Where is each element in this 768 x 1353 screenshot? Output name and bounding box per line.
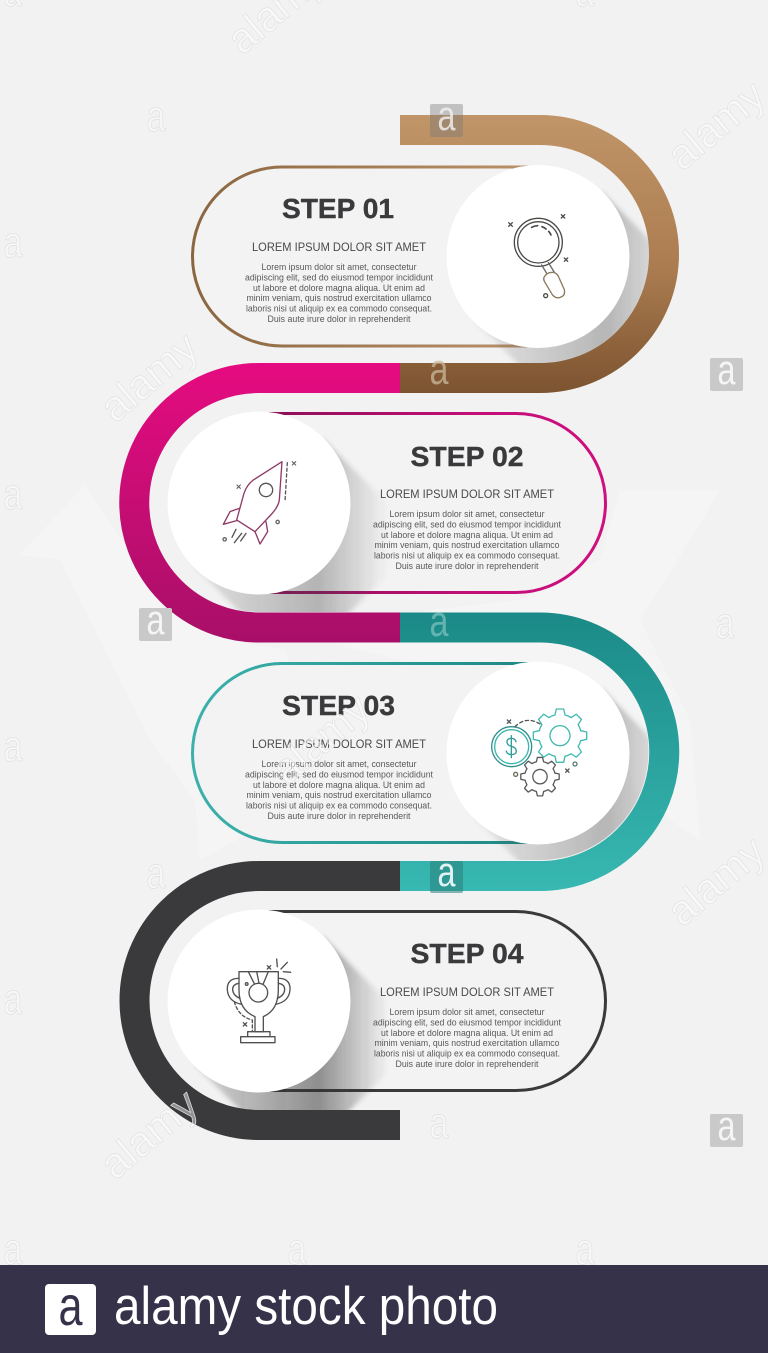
watermark letters: a xyxy=(4,975,23,1024)
watermark tiles: a xyxy=(430,345,449,394)
panel: step 02 xyxy=(168,412,607,612)
body text 01: Duis aute irure dolor in reprehenderit xyxy=(268,314,411,324)
watermark letters: a xyxy=(4,722,23,771)
watermark letters: a xyxy=(576,470,595,519)
subheading 03: LOREM IPSUM DOLOR SIT AMET xyxy=(252,737,427,751)
body text 03: ut labore et dolore magna aliqua. Ut enim ad xyxy=(253,780,425,790)
watermark letters: a xyxy=(288,218,307,267)
band: teal xyxy=(400,628,664,876)
body text 01 xyxy=(245,262,433,324)
watermark letters: a xyxy=(288,1225,307,1274)
heading 02: STEP 02 xyxy=(410,441,524,472)
body text 03: laboris nisi ut aliquip ex ea commodo consequat. xyxy=(246,801,432,811)
watermark letters: a xyxy=(288,722,307,771)
watermark tiles: a xyxy=(438,92,456,139)
body text 02: laboris nisi ut aliquip ex ea commodo consequat. xyxy=(374,551,560,561)
watermark words: alamy xyxy=(263,685,379,793)
subheading 01: LOREM IPSUM DOLOR SIT AMET xyxy=(252,240,427,254)
long shadow 02 xyxy=(204,438,378,612)
watermark letters: a xyxy=(576,722,595,771)
icon: trophy xyxy=(227,959,291,1043)
long shadow 04 xyxy=(195,935,384,1110)
body text 02: ut labore et dolore magna aliqua. Ut enim ad xyxy=(381,530,553,540)
watermark letters: a xyxy=(576,218,595,267)
footer wordmark: alamy stock photo xyxy=(114,1277,498,1336)
circle 03 xyxy=(446,662,630,844)
body text 04: laboris nisi ut aliquip ex ea commodo consequat. xyxy=(374,1049,560,1059)
pill outline 03 xyxy=(192,664,622,842)
panel: step 01 xyxy=(191,165,649,363)
body text 04: Lorem ipsum dolor sit amet, consectetur xyxy=(390,1007,544,1017)
body text 02: adipiscing elit, sed do eiusmod tempor incididunt xyxy=(373,519,561,529)
watermark tiles: a xyxy=(430,597,449,646)
subheading 04: LOREM IPSUM DOLOR SIT AMET xyxy=(380,985,555,999)
body text 04: ut labore et dolore magna aliqua. Ut enim ad xyxy=(381,1028,553,1038)
watermark letters: a xyxy=(576,975,595,1024)
circle 04 xyxy=(168,910,350,1092)
watermark tiles: a xyxy=(718,1102,736,1149)
body text 02 xyxy=(373,509,561,571)
pill outline 01 xyxy=(192,167,622,346)
icon: magnifier xyxy=(509,215,568,298)
watermark letters: a xyxy=(4,470,23,519)
watermark tiles xyxy=(139,92,743,1149)
watermark words: alamy xyxy=(91,323,207,431)
panel: step 04 xyxy=(168,910,607,1110)
circle 01 xyxy=(446,165,630,348)
watermark tiles: a xyxy=(146,596,165,643)
footer logo xyxy=(45,1274,96,1337)
body text 03: adipiscing elit, sed do eiusmod tempor incididunt xyxy=(245,769,433,779)
band: brown xyxy=(400,130,664,378)
panel: step 03 xyxy=(191,662,648,860)
watermark letters: a xyxy=(4,218,23,267)
long shadow 01 xyxy=(486,191,649,363)
body text 01: ut labore et dolore magna aliqua. Ut enim ad xyxy=(253,283,425,293)
world map backdrop xyxy=(20,485,720,860)
band: magenta xyxy=(134,378,400,628)
body text 03 xyxy=(245,759,433,821)
heading 03: STEP 03 xyxy=(282,690,395,721)
body text 03: Lorem ipsum dolor sit amet, consectetur xyxy=(262,759,416,769)
body text 03: minim veniam, quis nostrud exercitation ullamco xyxy=(246,790,432,800)
body text 01: laboris nisi ut aliquip ex ea commodo consequat. xyxy=(246,304,432,314)
watermark letters: a xyxy=(146,849,166,898)
watermark words xyxy=(91,0,768,1188)
watermark tiles: a xyxy=(438,848,456,895)
footer bar xyxy=(0,1265,768,1353)
circle 02 xyxy=(168,412,350,594)
watermark letters: a xyxy=(4,1225,23,1274)
body text 04 xyxy=(373,1007,561,1069)
footer logo: a xyxy=(58,1274,83,1337)
body text 04: Duis aute irure dolor in reprehenderit xyxy=(396,1059,539,1069)
pill outline 02 xyxy=(176,414,606,592)
watermark words: alamy xyxy=(91,1080,207,1188)
subheading 02: LOREM IPSUM DOLOR SIT AMET xyxy=(380,487,555,501)
body text 01: adipiscing elit, sed do eiusmod tempor incididunt xyxy=(245,272,433,282)
body text 01: minim veniam, quis nostrud exercitation ullamco xyxy=(246,293,432,303)
watermark letters: a xyxy=(288,975,307,1024)
watermark letters: a xyxy=(288,470,307,519)
heading 04: STEP 04 xyxy=(410,938,524,969)
body text 03: Duis aute irure dolor in reprehenderit xyxy=(268,811,411,821)
icon: coin and gears xyxy=(492,709,587,796)
body text 02: Lorem ipsum dolor sit amet, consectetur xyxy=(390,509,544,519)
body text 01: Lorem ipsum dolor sit amet, consectetur xyxy=(262,262,416,272)
body text 02: minim veniam, quis nostrud exercitation ullamco xyxy=(374,540,560,550)
body text 02: Duis aute irure dolor in reprehenderit xyxy=(396,561,539,571)
watermark letters: a xyxy=(146,92,166,141)
icon: rocket xyxy=(223,462,296,544)
heading 01: STEP 01 xyxy=(282,193,394,224)
watermark letters: a xyxy=(430,1099,449,1148)
body text 04: adipiscing elit, sed do eiusmod tempor incididunt xyxy=(373,1017,561,1027)
watermark letters: a xyxy=(716,599,735,648)
long shadow 03 xyxy=(484,688,648,860)
band: charcoal xyxy=(134,876,400,1125)
watermark letters: a xyxy=(576,1225,595,1274)
body text 04: minim veniam, quis nostrud exercitation ullamco xyxy=(374,1038,560,1048)
watermark tiles: a xyxy=(718,346,736,393)
pill outline 04 xyxy=(176,912,606,1090)
